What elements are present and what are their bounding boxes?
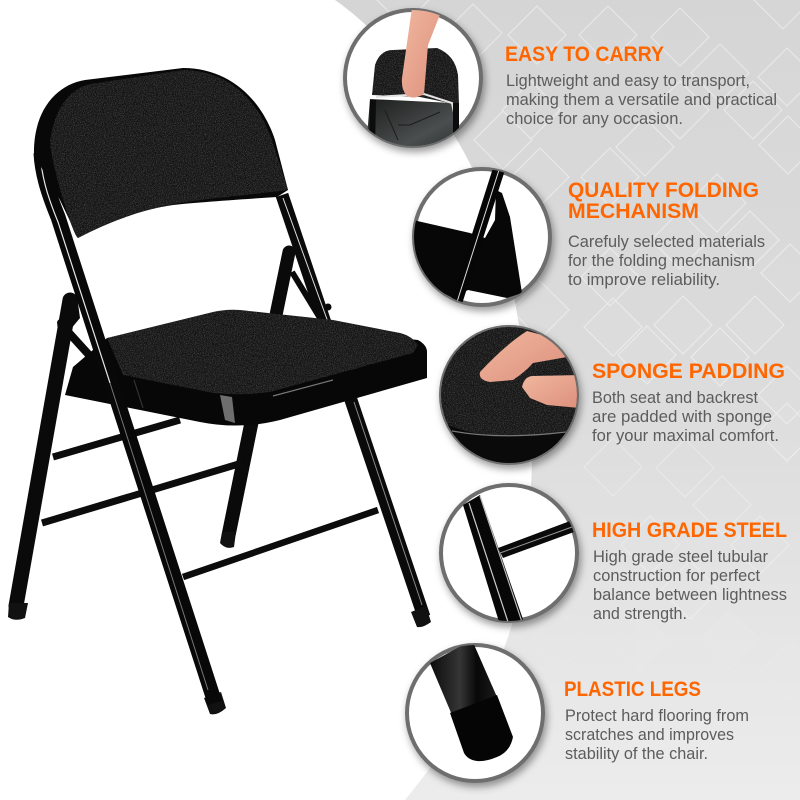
metal tube (430, 645, 496, 713)
chair rubber feet (8, 532, 431, 714)
text block: Carefuly selected materials (568, 233, 765, 251)
text block: for the folding mechanism (568, 252, 755, 270)
text block: choice for any occasion. (506, 110, 683, 128)
rubber cap (450, 695, 513, 761)
cross tube (498, 521, 574, 558)
text block: Lightweight and easy to transport, (506, 72, 750, 90)
feature: quality folding mechanism (568, 179, 765, 289)
arm and hand (402, 8, 441, 98)
text block: High grade steel tubular (593, 548, 768, 566)
heading: QUALITY FOLDING (568, 179, 759, 202)
text block (592, 389, 779, 445)
background: grey curved panel with diamond pattern (300, 0, 800, 800)
seat rim (448, 425, 566, 463)
heading (568, 179, 759, 223)
padded cushion (438, 325, 580, 437)
chair left rail (40, 150, 215, 703)
text block (565, 707, 749, 763)
text block (506, 72, 777, 128)
second finger (522, 375, 580, 408)
chair seat cushion (107, 310, 418, 394)
feature: plastic legs (564, 678, 749, 763)
text block: scratches and improves (565, 726, 734, 744)
heading: SPONGE PADDING (592, 360, 785, 383)
text block: construction for perfect (593, 567, 760, 585)
chair back with fabric (372, 48, 459, 105)
heading: HIGH GRADE STEEL (592, 519, 787, 542)
icon: high grade steel tube close-up (441, 485, 577, 625)
text block: are padded with sponge (592, 408, 772, 426)
chair underside plate (368, 99, 456, 146)
pressing finger (480, 331, 567, 382)
text block: stability of the chair. (565, 745, 708, 763)
icon: finger pressing sponge padding (438, 325, 580, 470)
main tube (463, 495, 525, 625)
text block: Both seat and backrest (592, 389, 758, 407)
chair seat frame (65, 320, 427, 426)
text block: for your maximal comfort. (592, 427, 779, 445)
icon: folding mechanism close-up (413, 168, 550, 305)
text block: and strength. (593, 605, 687, 623)
text block: balance between lightness (593, 586, 787, 604)
feature: sponge padding (592, 360, 785, 445)
heading: MECHANISM (568, 200, 699, 223)
text block (568, 233, 765, 289)
chair rear legs (16, 252, 289, 606)
chair backrest cushion (50, 70, 288, 238)
seat and bracket (413, 190, 522, 298)
heading: EASY TO CARRY (505, 43, 664, 66)
feature: high grade steel (592, 519, 787, 623)
text block: making them a versatile and practical (506, 91, 777, 109)
chair backrest frame (34, 68, 288, 238)
icon: hand carrying chair (345, 8, 481, 150)
feature: easy to carry (505, 43, 777, 128)
text block (593, 548, 787, 623)
chair right rail (282, 195, 424, 617)
tube rail (451, 168, 505, 304)
chair hinge brackets (57, 272, 332, 367)
text block: Protect hard flooring from (565, 707, 749, 725)
chair illustration (8, 68, 431, 714)
text block: to improve reliability. (568, 271, 720, 289)
icon: plastic leg cap close-up (407, 640, 543, 781)
chair cross bars (42, 420, 378, 577)
heading: PLASTIC LEGS (564, 678, 701, 701)
